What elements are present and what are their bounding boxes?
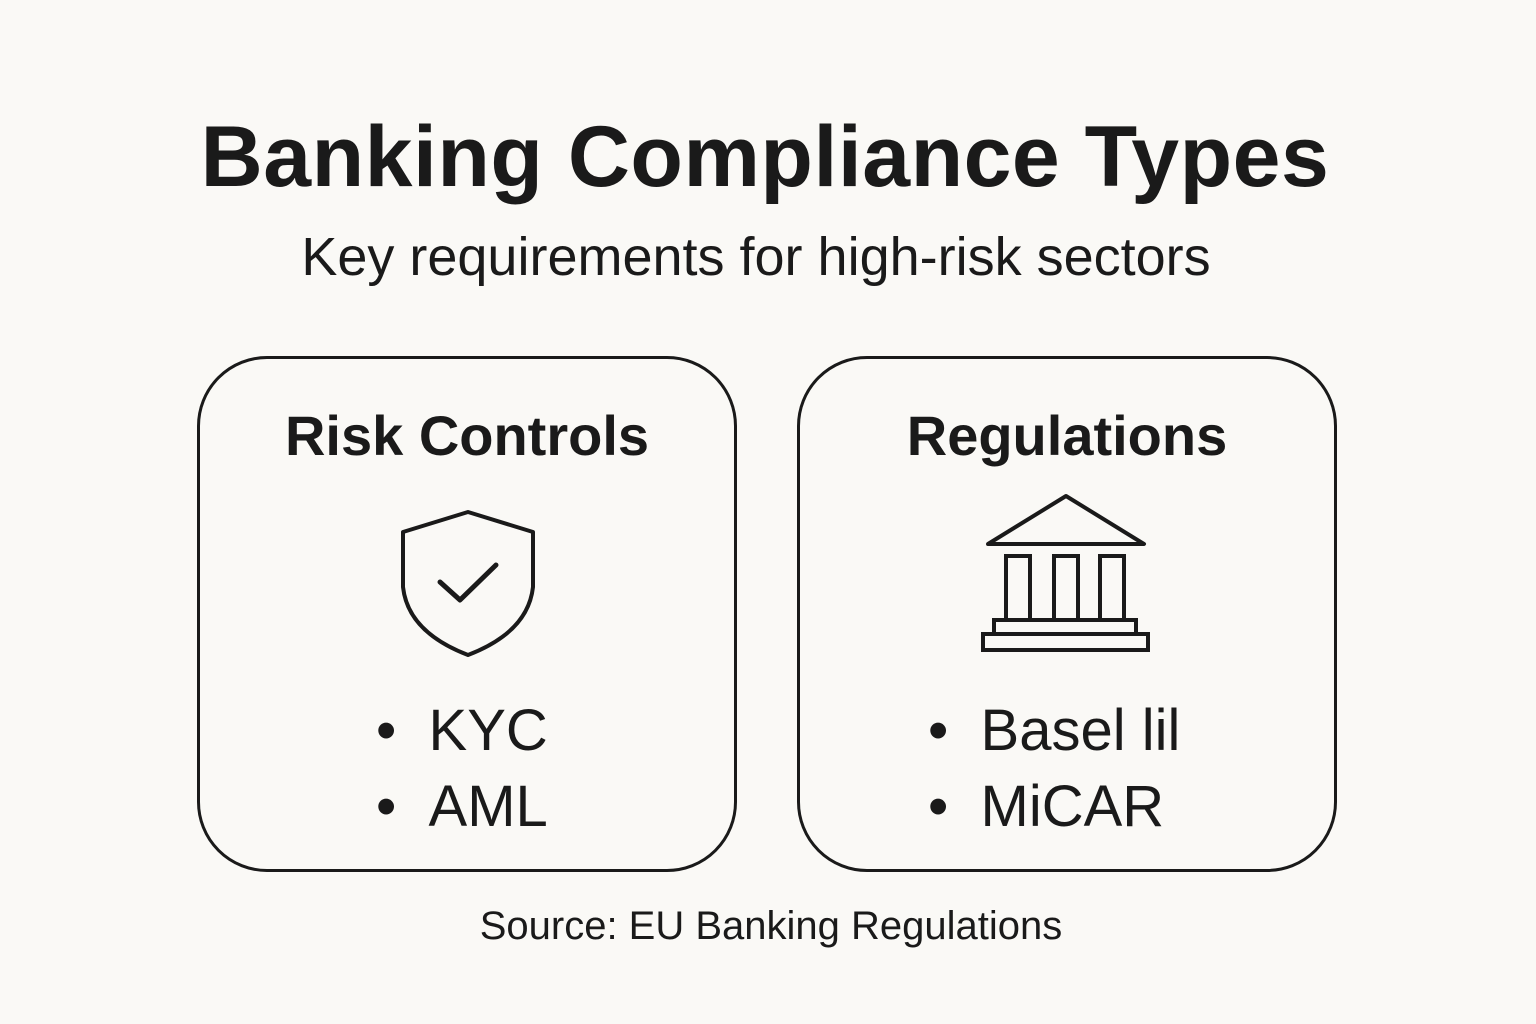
list: KYC, AML: • KYC [376, 698, 548, 763]
panel: risk controls [197, 356, 737, 872]
heading: risk controls: Risk Controls [285, 404, 649, 467]
panel: regulations [797, 356, 1337, 872]
list: Basel III, MiCAR [928, 698, 1180, 839]
icon: shield [401, 510, 535, 657]
title: Banking Compliance Types [201, 109, 1329, 205]
source note: Source: EU Banking Regulations [480, 904, 1062, 948]
list: KYC, AML [376, 698, 548, 839]
icon: bank building [981, 494, 1150, 652]
heading: regulations: Regulations [907, 404, 1227, 467]
subtitle: Key requirements for high-risk sectors [301, 227, 1211, 287]
list: KYC, AML: • AML [376, 774, 548, 839]
list: Basel III, MiCAR: • Basel lil [928, 698, 1180, 763]
list: Basel III, MiCAR: • MiCAR [928, 774, 1164, 839]
